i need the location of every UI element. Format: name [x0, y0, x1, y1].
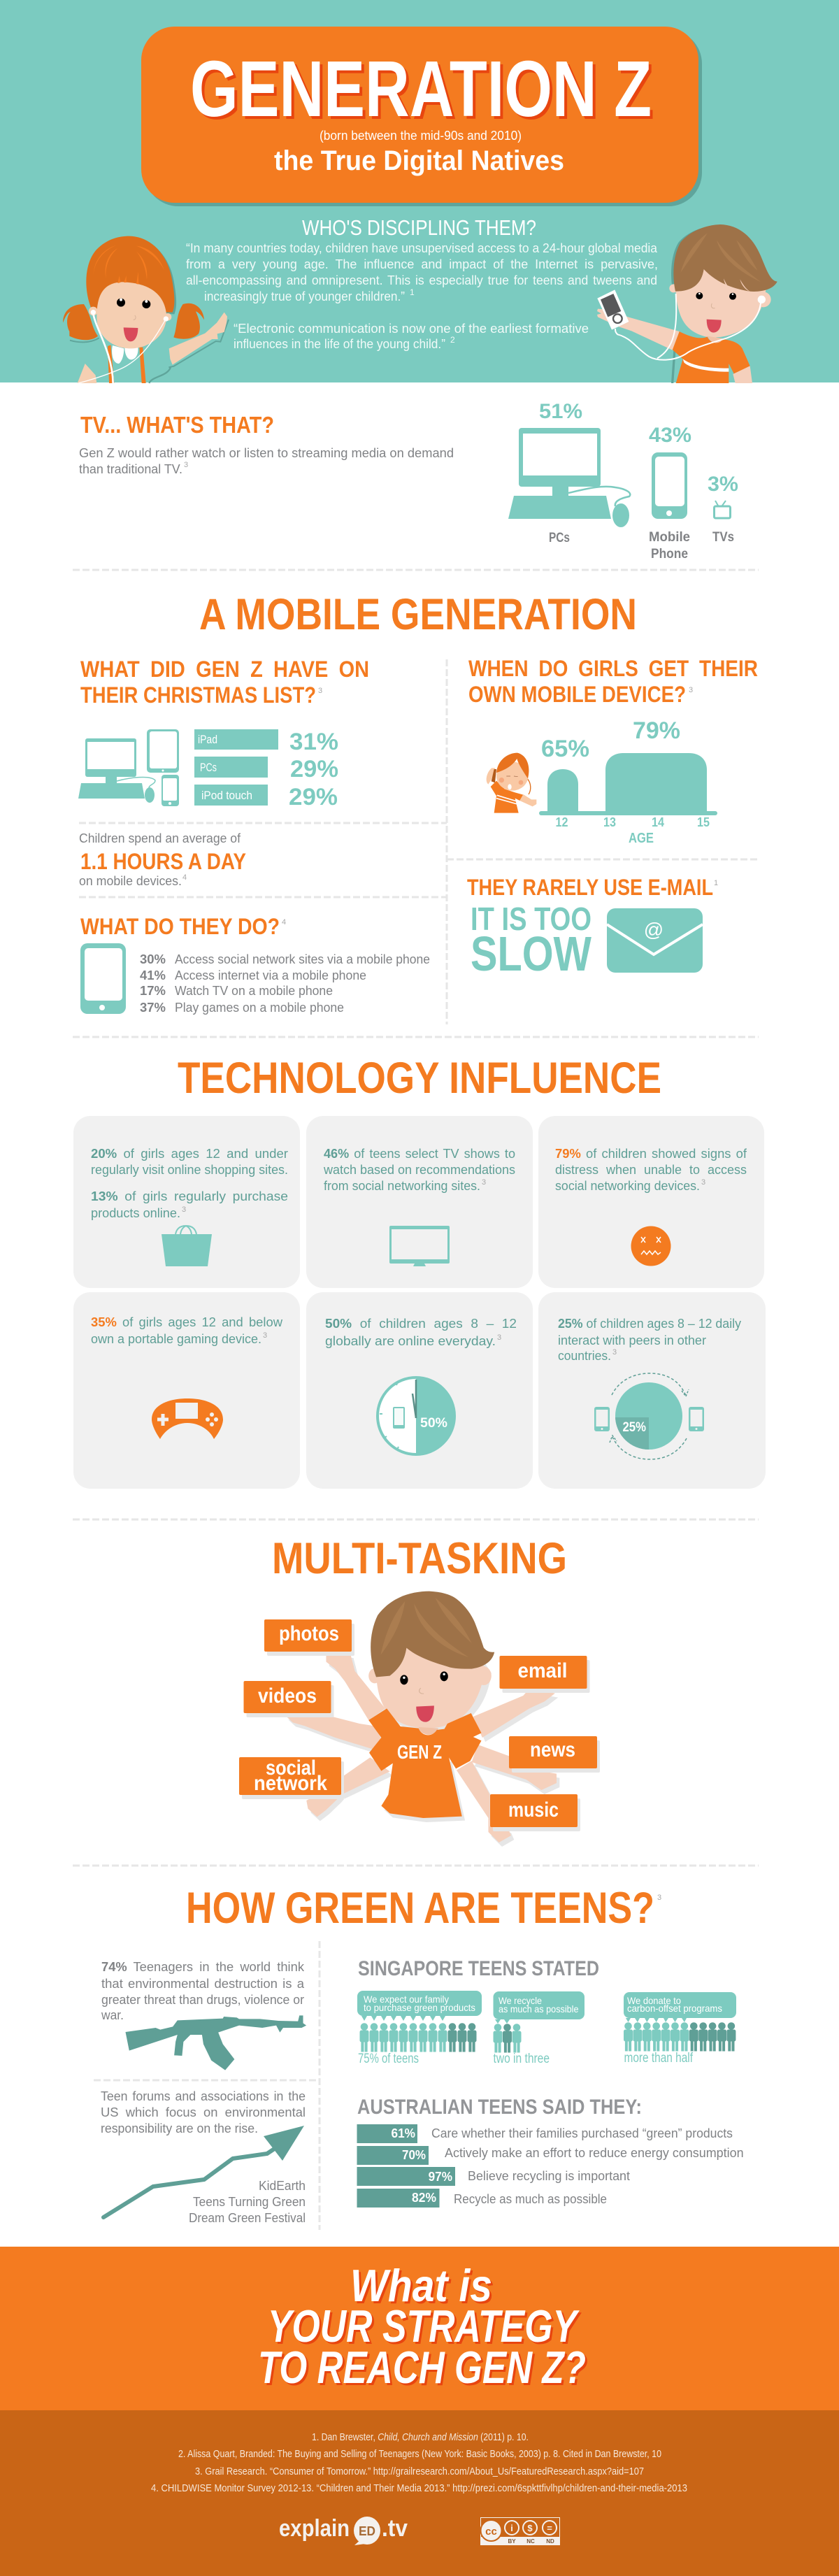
bar chart: christmas list: iPod touch — [201, 789, 252, 802]
callout: hours a day: on mobile devices. — [79, 874, 182, 888]
section: how green are teens — [94, 1884, 744, 2230]
section: multi-tasking — [239, 1534, 600, 1847]
quote text: from a very young age. The influence and impact of the Internet is pervasive, — [186, 257, 658, 271]
bar chart: christmas list: 29% — [290, 756, 338, 782]
pictogram: two in three — [494, 1991, 585, 2066]
bar chart: australian teens: 82% — [412, 2191, 436, 2205]
box: news — [509, 1736, 600, 1773]
card: online everyday: 3 — [497, 1333, 501, 1342]
callout: hours a day: 1.1 HOURS A DAY — [80, 849, 246, 874]
pictogram: more than half: We donate to — [627, 1995, 681, 2006]
heading: HOW GREEN ARE TEENS? — [186, 1884, 654, 1933]
arrow: rising trend — [103, 2126, 304, 2217]
card: shopping: regularly visit online shopping sites. — [91, 1163, 288, 1177]
references: 3. Grail Research. “Consumer of Tomorrow.” http://grailresearch.com/About_Us/FeaturedResearch.aspx?aid=107 — [195, 2466, 644, 2477]
panel: they rarely use e-mail: SLOW — [471, 926, 591, 981]
illustration: multi-armed boy — [285, 1591, 559, 1847]
card: tv recommendations: 3 — [482, 1178, 486, 1187]
list: organisations: Dream Green Festival — [189, 2211, 306, 2225]
card: online everyday: globally are online everyday. — [325, 1334, 496, 1348]
heading: christmas list: WHAT DID GEN Z HAVE ON — [80, 657, 369, 682]
chart: age of first mobile device: 65% — [541, 736, 589, 762]
icon: shopping bag — [162, 1226, 212, 1266]
quote text: “Electronic communication is now one of the earliest formative — [234, 322, 589, 336]
heading: australian teens: AUSTRALIAN TEENS SAID THEY: — [357, 2096, 642, 2119]
chart: age of first mobile device: 14 — [652, 815, 664, 829]
card: peers in other countries: interact with peers in other — [558, 1333, 706, 1347]
logo: explainED.tv — [279, 2515, 408, 2545]
list: mobile activities: 41% — [140, 968, 166, 982]
references: 2. Alissa Quart, Branded: The Buying and Selling of Teenagers (New York: Basic Books, 2003) p. 8. Cited in Dan Brewster, 10 — [178, 2448, 661, 2460]
stat: PCs 51% — [508, 400, 630, 545]
call to action text: What is — [350, 2260, 492, 2311]
text: 74% teenagers: war. — [101, 2008, 124, 2022]
icon: distressed face — [631, 1226, 671, 1266]
header panel — [0, 0, 839, 383]
callout: hours a day — [79, 831, 246, 888]
quote text: all-encompassing and omnipresent. This is especially true for teens and tweens and — [186, 273, 657, 287]
box: social network: social — [266, 1756, 316, 1780]
list: mobile activities — [140, 952, 430, 1015]
card: shopping: 20% of girls ages 12 and under — [91, 1147, 288, 1161]
section: a mobile generation — [78, 590, 759, 1024]
icon: clock 50%: 50% — [420, 1416, 447, 1431]
bar chart: australian teens: Actively make an effort to reduce energy consumption — [445, 2146, 744, 2160]
pictogram: more than half: carbon-offset programs — [627, 2003, 722, 2014]
badge: creative commons: NC — [526, 2538, 535, 2545]
card: shopping: products online. — [91, 1206, 180, 1220]
list: mobile activities: Access social network sites via a mobile phone — [175, 952, 430, 966]
card: distress: distress when unable to access — [555, 1163, 747, 1177]
box: photos: photos — [279, 1622, 339, 1645]
list: mobile activities: Play games on a mobile phone — [175, 1001, 344, 1015]
heading: 3 — [657, 1894, 661, 1902]
heading: what do they do: 4 — [282, 918, 286, 926]
card: peers in other countries: 25% of children ages 8 – 12 daily — [558, 1317, 741, 1331]
card: peers in other countries: countries. — [558, 1349, 611, 1363]
pictogram: 75% of teens: to purchase green products — [364, 2002, 475, 2013]
quote text — [186, 241, 658, 351]
call to action text: YOUR STRATEGY — [270, 2303, 582, 2354]
section: TV what's that — [79, 400, 738, 561]
title: GENERATION Z — [193, 48, 654, 136]
icons: devices — [78, 729, 179, 806]
pictogram: two in three: We recycle — [499, 1995, 542, 2006]
card: gaming — [73, 1292, 300, 1489]
body text: Gen Z would rather watch or listen to streaming media on demand — [79, 446, 454, 460]
icon: pie 25% with phones: 25% — [622, 1420, 646, 1435]
list: organisations — [189, 2179, 306, 2225]
panel: they rarely use e-mail — [467, 875, 718, 981]
text: 74% teenagers: greater threat than drugs, violence or — [101, 1993, 304, 2007]
heading: singapore: SINGAPORE TEENS STATED — [358, 1957, 599, 1980]
heading: TV... WHAT'S THAT? — [80, 412, 274, 438]
body text: 3 — [184, 461, 188, 469]
card: tv recommendations: watch based on recommendations — [323, 1163, 515, 1177]
heading: when do girls get their own device — [468, 656, 758, 707]
box: videos: videos — [258, 1684, 317, 1708]
icon: game controller — [152, 1398, 223, 1439]
card: shopping — [73, 1116, 300, 1288]
stat: mobile phone 43% — [649, 424, 691, 561]
stat: PCs 51%: 51% — [539, 400, 582, 423]
subtitle dates: (born between the mid-90s and 2010) — [320, 129, 522, 143]
box: photos — [264, 1619, 354, 1656]
heading: what do they do: WHAT DO THEY DO? — [80, 914, 280, 939]
pictogram: two in three: two in three — [494, 2052, 550, 2066]
card: peers in other countries — [538, 1292, 766, 1489]
pictogram: 75% of teens: 75% of teens — [358, 2052, 419, 2066]
box: music — [490, 1794, 580, 1831]
stat: TVs 3%: TVs — [712, 530, 734, 545]
bar chart: australian teens — [357, 2124, 744, 2208]
heading: when do girls get their own device: WHEN DO GIRLS GET THEIR — [468, 656, 758, 681]
box: news: news — [530, 1738, 575, 1761]
logo: explainED.tv: .tv — [382, 2515, 408, 2542]
box: email: email — [517, 1659, 568, 1682]
text: 74% teenagers: that environmental destruction is a — [101, 1977, 305, 1991]
box: videos — [243, 1681, 334, 1717]
panel: they rarely use e-mail: 1 — [714, 879, 718, 887]
card: gaming: 35% of girls ages 12 and below — [91, 1315, 283, 1329]
icon: pie 25% with phones — [594, 1373, 704, 1459]
icon: clock 50% — [378, 1377, 455, 1455]
badge: creative commons: = — [547, 2523, 552, 2533]
references — [151, 2431, 687, 2494]
stat: mobile phone 43%: Mobile — [649, 530, 690, 545]
card: shopping: 3 — [182, 1205, 186, 1214]
heading: christmas list — [80, 657, 369, 708]
card: gaming: 3 — [263, 1331, 267, 1340]
quote text: 1 — [410, 287, 415, 297]
quote text: influences in the life of the young child.” — [234, 337, 445, 351]
call to action text: TO REACH GEN Z? — [258, 2342, 586, 2393]
card: distress: 3 — [701, 1178, 705, 1187]
bar chart: australian teens: 70% — [402, 2148, 426, 2162]
bar chart: australian teens: 61% — [392, 2126, 415, 2140]
references: 1. Dan Brewster, Child, Church and Mission (2011) p. 10. — [312, 2431, 529, 2443]
bar chart: christmas list: PCs — [200, 761, 217, 774]
icon: rifle — [125, 2015, 306, 2070]
box: email — [499, 1656, 590, 1693]
text: 74% teenagers: 74% Teenagers in the world think — [101, 1960, 305, 1974]
call to action text: What is — [352, 2262, 494, 2313]
logo: explainED.tv: explain — [279, 2515, 350, 2542]
heading: christmas list: 3 — [318, 687, 322, 695]
quote text: “In many countries today, children have unsupervised access to a 24-hour global media — [186, 241, 658, 255]
box: music: music — [508, 1798, 559, 1822]
list: mobile activities: Watch TV on a mobile phone — [175, 984, 333, 998]
bar chart: christmas list: 31% — [289, 729, 338, 755]
quote text: 2 — [450, 335, 455, 345]
pictogram: 75% of teens — [357, 1991, 482, 2066]
badge: creative commons: cc — [485, 2526, 497, 2538]
icon: phone — [80, 943, 126, 1014]
bar chart: christmas list — [194, 729, 338, 810]
badge: creative commons — [481, 2517, 559, 2545]
text: teen forums: US which focus on environmental — [101, 2105, 306, 2119]
card: peers in other countries: 3 — [612, 1348, 617, 1357]
box: social network: network — [254, 1772, 327, 1795]
stat: TVs 3% — [708, 473, 738, 545]
list: mobile activities: 30% — [140, 952, 166, 966]
text: teen forums — [101, 2089, 306, 2135]
call to action text: YOUR STRATEGY — [268, 2300, 580, 2352]
text: 74% teenagers — [101, 1960, 305, 2022]
body text: than traditional TV. — [79, 462, 182, 476]
list: mobile activities: 37% — [140, 1001, 166, 1015]
card: tv recommendations: from social networking sites. — [324, 1179, 480, 1193]
callout: hours a day: 4 — [182, 873, 187, 882]
logo: explainED.tv: ED — [359, 2524, 375, 2538]
card: tv recommendations — [306, 1116, 533, 1288]
section: technology influence — [73, 1054, 766, 1489]
badge: creative commons: ND — [546, 2538, 554, 2545]
card: tv recommendations: 46% of teens select TV shows to — [324, 1147, 515, 1161]
chart: age of first mobile device: 15 — [697, 815, 710, 829]
icon: envelope — [607, 908, 703, 973]
bar chart: australian teens: 97% — [429, 2170, 452, 2184]
pictogram: 75% of teens: We expect our family — [364, 1994, 449, 2005]
pictogram: more than half: more than half — [624, 2051, 694, 2066]
quote text: increasingly true of younger children.” — [204, 289, 405, 303]
icon: tv — [389, 1226, 450, 1266]
footer panel — [0, 2410, 839, 2576]
heading: TECHNOLOGY INFLUENCE — [178, 1054, 661, 1103]
illustration: boy with music player — [597, 224, 777, 383]
heading: A MOBILE GENERATION — [199, 590, 637, 639]
illustration: girl with earphones — [63, 236, 229, 383]
bar chart: australian teens: Believe recycling is important — [468, 2169, 630, 2183]
chart: age of first mobile device — [539, 717, 717, 846]
bar chart: australian teens: Care whether their families purchased “green” products — [431, 2126, 733, 2140]
text: teen forums: responsibility are on the rise. — [101, 2121, 258, 2135]
list: mobile activities: 17% — [140, 984, 166, 998]
bar chart: christmas list: iPad — [198, 733, 217, 746]
badge: creative commons: $ — [527, 2523, 533, 2533]
shirt label: GEN Z — [397, 1741, 442, 1763]
title banner — [141, 27, 702, 206]
pictogram: two in three: as much as possible — [499, 2003, 579, 2015]
chart: age of first mobile device: 79% — [633, 717, 680, 744]
icon: envelope: @ — [644, 919, 664, 940]
stat: TVs 3%: 3% — [708, 473, 738, 496]
card: online everyday: 50% of children ages 8 – 12 — [325, 1317, 517, 1331]
chart: age of first mobile device: 13 — [603, 815, 616, 829]
references: 4. CHILDWISE Monitor Survey 2012-13. “Children and Their Media 2013.” http://prezi.com/6spkttfivlhp/children-and-their-media-2013 — [151, 2482, 687, 2494]
card: distress: 79% of children showed signs of — [555, 1147, 747, 1161]
callout: hours a day: Children spend an average of — [79, 831, 241, 845]
chart: age of first mobile device: 12 — [555, 815, 568, 829]
stat: PCs 51%: PCs — [549, 531, 570, 545]
call to action panel — [0, 2247, 839, 2410]
stat: mobile phone 43%: Phone — [651, 547, 688, 561]
subtitle: the True Digital Natives — [274, 145, 564, 176]
card: online everyday — [306, 1292, 533, 1489]
title: GENERATION Z — [190, 45, 652, 133]
card: gaming: own a portable gaming device. — [91, 1332, 261, 1346]
box: social network — [239, 1756, 344, 1799]
bar chart: australian teens: Recycle as much as possible — [454, 2192, 607, 2206]
heading: when do girls get their own device: 3 — [689, 686, 693, 694]
text: teen forums: Teen forums and associations in the — [101, 2089, 306, 2103]
stat: mobile phone 43%: 43% — [649, 424, 691, 447]
illustration: small girl on phone — [487, 753, 536, 813]
pictogram: more than half — [624, 1992, 736, 2066]
panel: they rarely use e-mail: THEY RARELY USE E-MAIL — [467, 875, 713, 900]
panel: they rarely use e-mail: IT IS TOO — [471, 901, 591, 937]
heading: who's disciplining them: WHO'S DISCIPLING THEM? — [302, 215, 536, 240]
card: distress — [538, 1116, 764, 1288]
heading: christmas list: THEIR CHRISTMAS LIST? — [80, 682, 316, 708]
badge: creative commons: i — [510, 2523, 513, 2533]
bar chart: christmas list: 29% — [289, 784, 338, 810]
chart: age of first mobile device: AGE — [629, 831, 654, 846]
heading: when do girls get their own device: OWN MOBILE DEVICE? — [468, 682, 686, 707]
list: mobile activities: Access internet via a mobile phone — [175, 968, 366, 982]
heading: MULTI-TASKING — [272, 1534, 567, 1583]
body text — [79, 446, 454, 476]
call to action text — [258, 2260, 588, 2395]
list: organisations: KidEarth — [259, 2179, 306, 2193]
card: distress: social networking devices. — [555, 1179, 700, 1193]
card: shopping: 13% of girls regularly purchase — [91, 1189, 288, 1203]
call to action text: TO REACH GEN Z? — [260, 2344, 588, 2395]
badge: creative commons: BY — [508, 2538, 516, 2545]
list: organisations: Teens Turning Green — [193, 2195, 306, 2209]
